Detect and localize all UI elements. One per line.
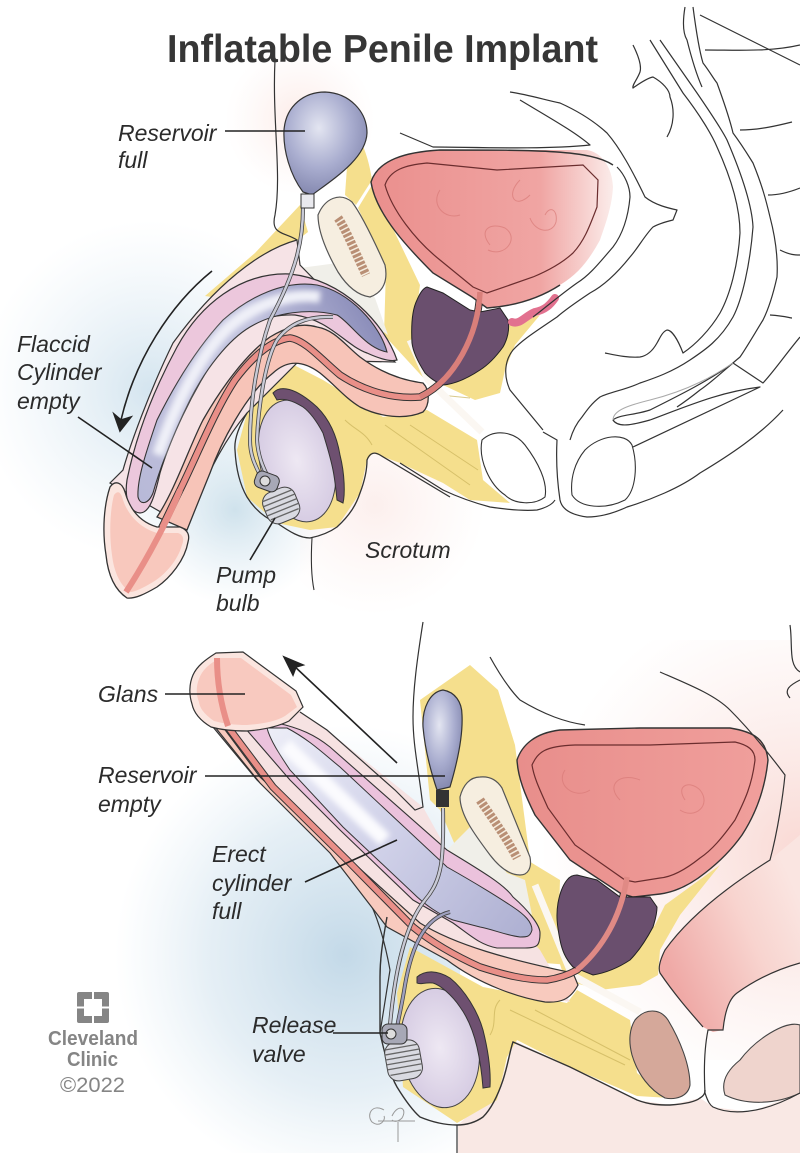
corpus band	[215, 727, 578, 1002]
release valve	[382, 1024, 424, 1083]
logo wordmark: Clinic	[67, 1048, 118, 1071]
label: flaccid cylinder empty: Flaccid	[17, 331, 91, 357]
pubic bone	[318, 197, 386, 297]
scrotum outline	[235, 413, 450, 538]
shaft skin	[207, 665, 570, 1002]
label: erect cylinder full: full	[212, 898, 242, 924]
logo wordmark: Cleveland	[48, 1027, 138, 1050]
scrotum stem line	[311, 538, 314, 590]
label: erect cylinder full: cylinder	[212, 870, 293, 896]
label: reservoir empty: Reservoir	[98, 762, 198, 788]
anal sphincter lobes	[481, 433, 635, 506]
Cleveland Clinic logo	[48, 992, 138, 1097]
pump bulb	[253, 469, 303, 527]
logo wordmark: ©2022	[60, 1074, 125, 1097]
cylinder highlight	[158, 296, 320, 455]
label: reservoir full: Reservoir	[118, 120, 218, 146]
label: erect cylinder full: Erect	[212, 841, 267, 867]
bladder	[517, 728, 768, 897]
title: Inflatable Penile Implant	[167, 28, 598, 71]
label: release valve: valve	[252, 1041, 306, 1067]
label: reservoir full: full	[118, 147, 148, 173]
logo mark	[77, 992, 109, 1023]
label: reservoir empty	[98, 762, 445, 817]
fat layer	[205, 125, 540, 530]
tunica	[126, 274, 397, 513]
pelvic outlines	[274, 7, 800, 517]
label: release valve	[252, 1012, 388, 1067]
label: release valve: Release	[252, 1012, 336, 1038]
label: flaccid cylinder empty: Cylinder	[17, 359, 103, 385]
label: pump bulb	[216, 518, 276, 616]
prostate	[412, 287, 509, 385]
belly pink	[659, 835, 800, 1032]
epididymis	[273, 389, 344, 503]
cylinder highlight	[285, 745, 385, 840]
reservoir full	[284, 92, 367, 208]
label: scrotum: Scrotum	[365, 537, 451, 563]
tunica	[245, 723, 540, 948]
connective tissue	[300, 262, 388, 335]
pubic bone	[460, 777, 531, 875]
glans	[190, 652, 303, 731]
label: erect cylinder full	[212, 840, 397, 924]
label: flaccid cylinder empty: empty	[17, 388, 81, 414]
bottom figure: inflated state	[190, 622, 800, 1153]
scrotum outline	[380, 917, 705, 1125]
skin outlines	[196, 622, 423, 1033]
label: flaccid cylinder empty	[17, 331, 152, 468]
tubing	[250, 207, 333, 475]
label: pump bulb: bulb	[216, 590, 260, 616]
reservoir empty	[423, 690, 462, 807]
label: glans: Glans	[98, 681, 159, 707]
pale band along prostate	[535, 885, 640, 1012]
arrow: downward flow	[114, 271, 212, 431]
label: pump bulb: Pump	[216, 562, 276, 588]
fat texture	[345, 395, 478, 485]
logo wordmark	[48, 1027, 138, 1097]
rectal wall	[613, 363, 733, 420]
fat texture	[490, 1000, 630, 1065]
pale band along prostate	[410, 340, 482, 432]
testis	[246, 392, 348, 530]
bladder	[371, 150, 613, 308]
glans	[104, 483, 189, 598]
prostate urethra	[577, 877, 627, 970]
urethra	[128, 292, 480, 590]
anal sphincter lobes	[630, 1011, 800, 1102]
label: reservoir empty: empty	[98, 791, 162, 817]
tubing	[390, 808, 450, 1028]
label: reservoir full	[118, 120, 305, 173]
top figure: flaccid state	[104, 7, 800, 598]
shaft skin	[110, 240, 395, 527]
pelvic outlines	[457, 625, 800, 1153]
testis	[393, 983, 487, 1113]
cylinder full	[267, 728, 532, 937]
corpus band	[157, 325, 428, 530]
prostate	[557, 875, 657, 975]
seminal vesicle	[512, 298, 555, 323]
cylinder empty	[138, 284, 387, 503]
arrow: upward flow	[284, 657, 397, 763]
connective tissue	[447, 827, 532, 915]
urethra	[225, 723, 627, 980]
epididymis	[417, 972, 490, 1088]
artist signature	[370, 1108, 415, 1142]
fat layer	[397, 665, 720, 1123]
prostate urethra	[420, 292, 480, 397]
